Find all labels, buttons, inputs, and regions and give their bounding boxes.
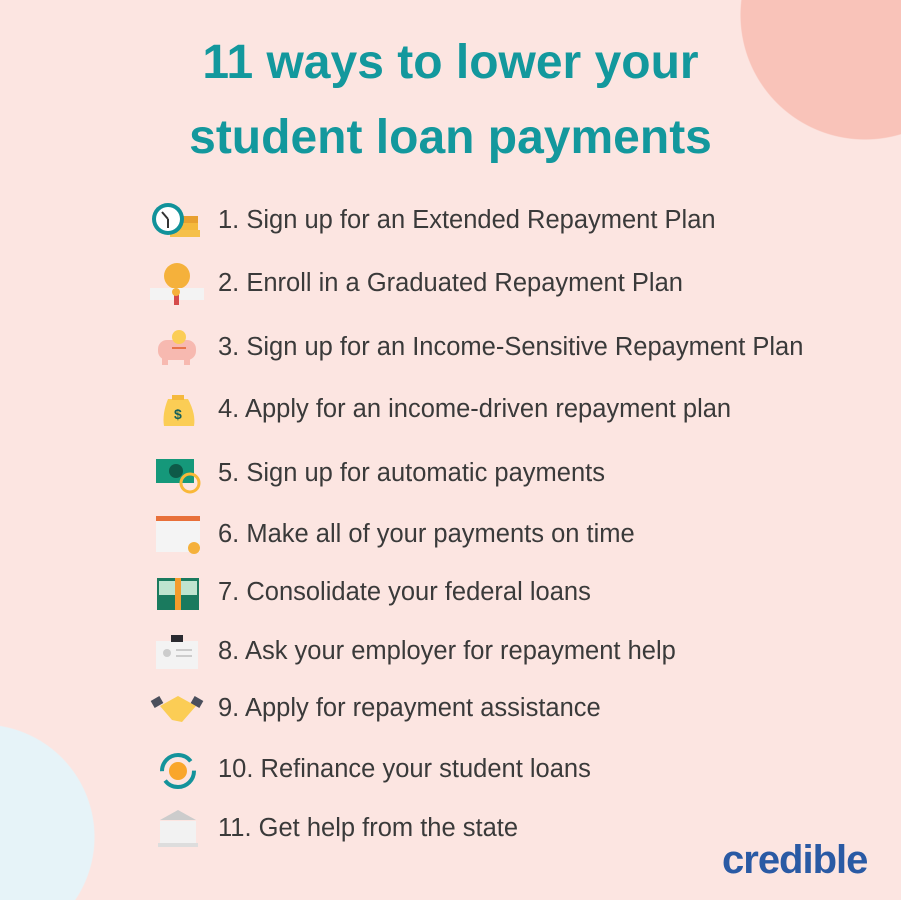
item 5: [156, 459, 605, 494]
icon: clock: [152, 203, 200, 237]
item 11: 11. Get help from the state: [218, 814, 518, 842]
title: student loan payments: [189, 111, 712, 164]
item 11: [158, 810, 518, 847]
icon: diploma coin: [150, 263, 204, 305]
item 6: 6. Make all of your payments on time: [218, 520, 635, 548]
icon: calendar: [156, 516, 200, 554]
item 9: 9. Apply for repayment assistance: [218, 694, 601, 722]
icon: bank: [158, 810, 198, 847]
icon: money bag: $: [174, 406, 182, 422]
item 3: 3. Sign up for an Income-Sensitive Repayment Plan: [218, 333, 803, 361]
icon: cash cycle: [156, 459, 200, 494]
item 10: 10. Refinance your student loans: [218, 755, 591, 783]
title: [189, 36, 712, 164]
item 7: 7. Consolidate your federal loans: [218, 578, 591, 606]
item 8: 8. Ask your employer for repayment help: [218, 637, 676, 665]
icon: id badge: [156, 635, 198, 669]
logo: credible: [722, 838, 867, 882]
item 5: 5. Sign up for automatic payments: [218, 459, 605, 487]
icon: piggy bank: [158, 330, 196, 365]
item 6: [156, 516, 635, 554]
title: 11 ways to lower your: [202, 36, 699, 89]
icon: refinance: [160, 753, 196, 789]
item 10: [160, 753, 591, 789]
item 2: 2. Enroll in a Graduated Repayment Plan: [218, 269, 683, 297]
item 1: 1. Sign up for an Extended Repayment Plan: [218, 206, 716, 234]
icon: handshake: [150, 696, 204, 722]
icon: money bag: [164, 395, 194, 426]
icon: cash stack: [157, 578, 199, 610]
item 2: [150, 263, 683, 305]
item 4: 4. Apply for an income-driven repayment plan: [218, 395, 731, 423]
